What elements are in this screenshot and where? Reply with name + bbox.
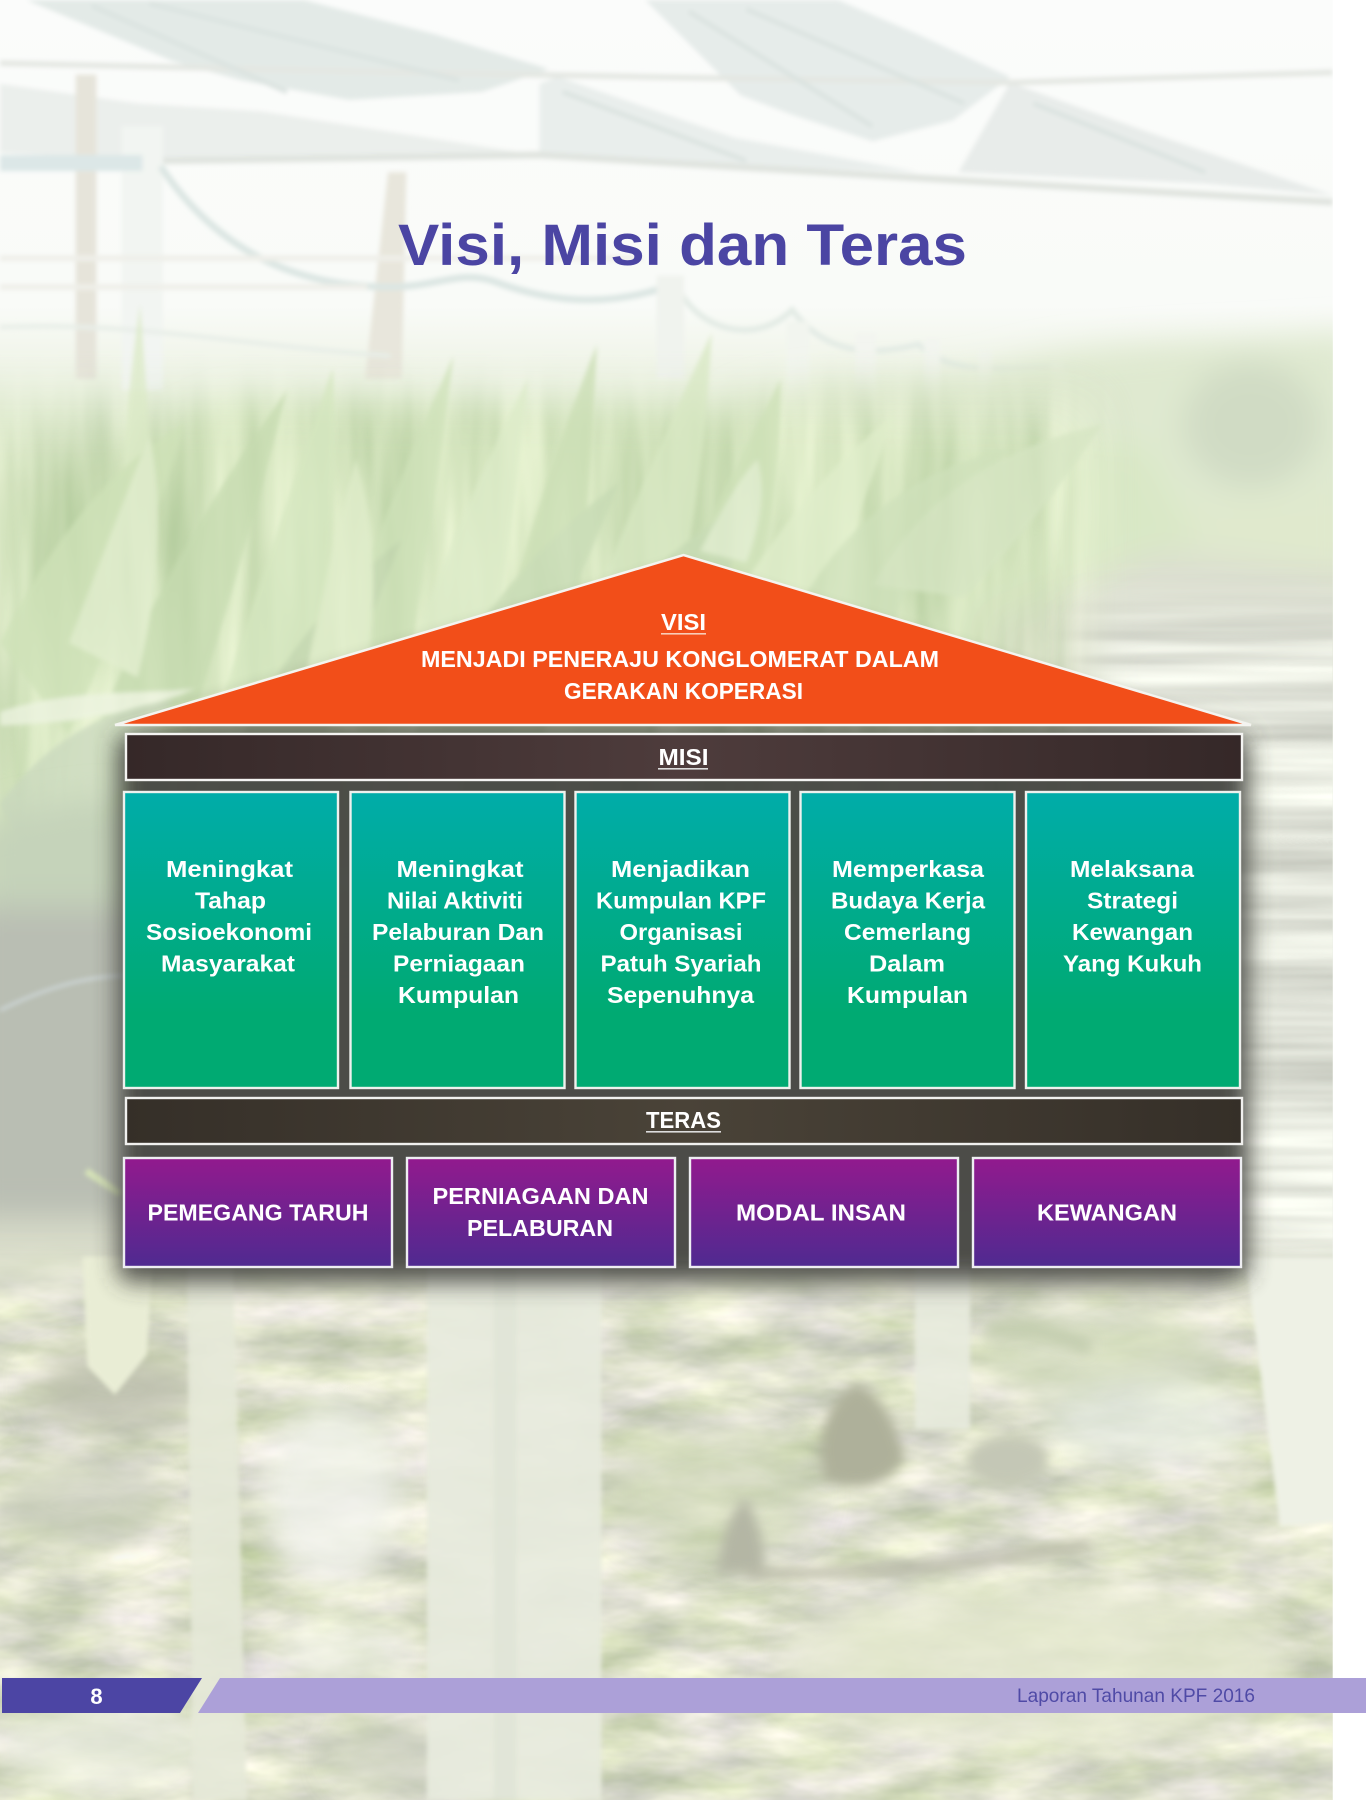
- card: misi 5: Kewangan: [1072, 919, 1193, 945]
- card: misi 3: Sepenuhnya: [607, 982, 754, 1008]
- card: misi 3: Organisasi: [620, 919, 742, 945]
- distant bushes: [182, 324, 1333, 720]
- card: perniagaan dan pelaburan: PELABURAN: [467, 1215, 613, 1241]
- dark left water: [0, 808, 123, 1226]
- card: perniagaan dan pelaburan: PERNIAGAAN DAN: [432, 1183, 648, 1209]
- footer: [2, 1678, 1366, 1713]
- card: misi 5: Yang Kukuh: [1063, 950, 1202, 976]
- card: misi 5: Melaksana: [1070, 856, 1194, 882]
- card: misi 2: Perniagaan: [393, 950, 525, 976]
- heading: visi: VISI: [661, 609, 706, 635]
- leaves: [0, 381, 1088, 798]
- card: misi 2: Nilai Aktiviti: [387, 888, 523, 914]
- panel: misi columns: [124, 792, 1240, 1088]
- card: pemegang taruh: PEMEGANG TARUH: [148, 1200, 368, 1226]
- band: teras: TERAS: [646, 1107, 721, 1133]
- card: kewangan: KEWANGAN: [1037, 1200, 1177, 1226]
- card: misi 1: [124, 792, 338, 1088]
- card: misi 4: Memperkasa: [832, 856, 984, 882]
- panel drop shadow: [118, 575, 1248, 1285]
- card: misi 2: Meningkat: [396, 856, 524, 882]
- card: modal insan: [690, 1158, 958, 1267]
- card: misi 4: Cemerlang: [844, 919, 971, 945]
- card: misi 4: Budaya Kerja: [831, 888, 985, 914]
- text: visi statement: [421, 646, 939, 704]
- text: visi statement: MENJADI PENERAJU KONGLOMERAT DALAM: [421, 646, 939, 672]
- card: misi 1: Sosioekonomi: [146, 919, 312, 945]
- card: misi 3: Kumpulan KPF: [596, 888, 766, 914]
- card: misi 5: [1026, 792, 1240, 1088]
- posts: [83, 1251, 1343, 1800]
- card: pemegang taruh: [124, 1158, 392, 1267]
- panel: teras columns: [124, 1158, 1241, 1267]
- right striations: [1081, 614, 1333, 1256]
- card: misi 3: [576, 792, 790, 1088]
- roof: visi: [115, 555, 1251, 725]
- lower water: [0, 1228, 1333, 1800]
- card: misi 5: Strategi: [1087, 888, 1178, 914]
- card: misi 1: Masyarakat: [161, 950, 295, 976]
- card: misi 1: Meningkat: [166, 856, 293, 882]
- card: misi 2: Kumpulan: [398, 982, 519, 1008]
- text: visi statement: GERAKAN KOPERASI: [564, 678, 803, 704]
- card: misi 2: [350, 792, 564, 1088]
- card: misi 4: [800, 792, 1014, 1088]
- footer: report label bar: Laporan Tahunan KPF 2016: [1017, 1685, 1255, 1707]
- title: Visi, Misi dan Teras: [398, 213, 967, 278]
- card: misi 4: Dalam: [869, 950, 945, 976]
- card: modal insan: MODAL INSAN: [736, 1200, 906, 1226]
- card: misi 3: Patuh Syariah: [600, 950, 762, 976]
- band: teras: [126, 1098, 1242, 1144]
- footer: page number tab: 8: [90, 1684, 103, 1709]
- house diagram: [115, 555, 1251, 1267]
- card: perniagaan dan pelaburan: [407, 1158, 675, 1267]
- card: misi 3: Menjadikan: [611, 856, 750, 882]
- card: misi 1: Tahap: [195, 888, 266, 914]
- card: misi 4: Kumpulan: [847, 982, 968, 1008]
- band: misi: [126, 734, 1242, 780]
- white margin: [1333, 0, 1366, 1800]
- card: kewangan: [973, 1158, 1241, 1267]
- band: misi: MISI: [658, 744, 708, 770]
- footer: page number tab: [2, 1678, 202, 1713]
- card: misi 2: Pelaburan Dan: [372, 919, 544, 945]
- footer: report label bar: [198, 1678, 1366, 1713]
